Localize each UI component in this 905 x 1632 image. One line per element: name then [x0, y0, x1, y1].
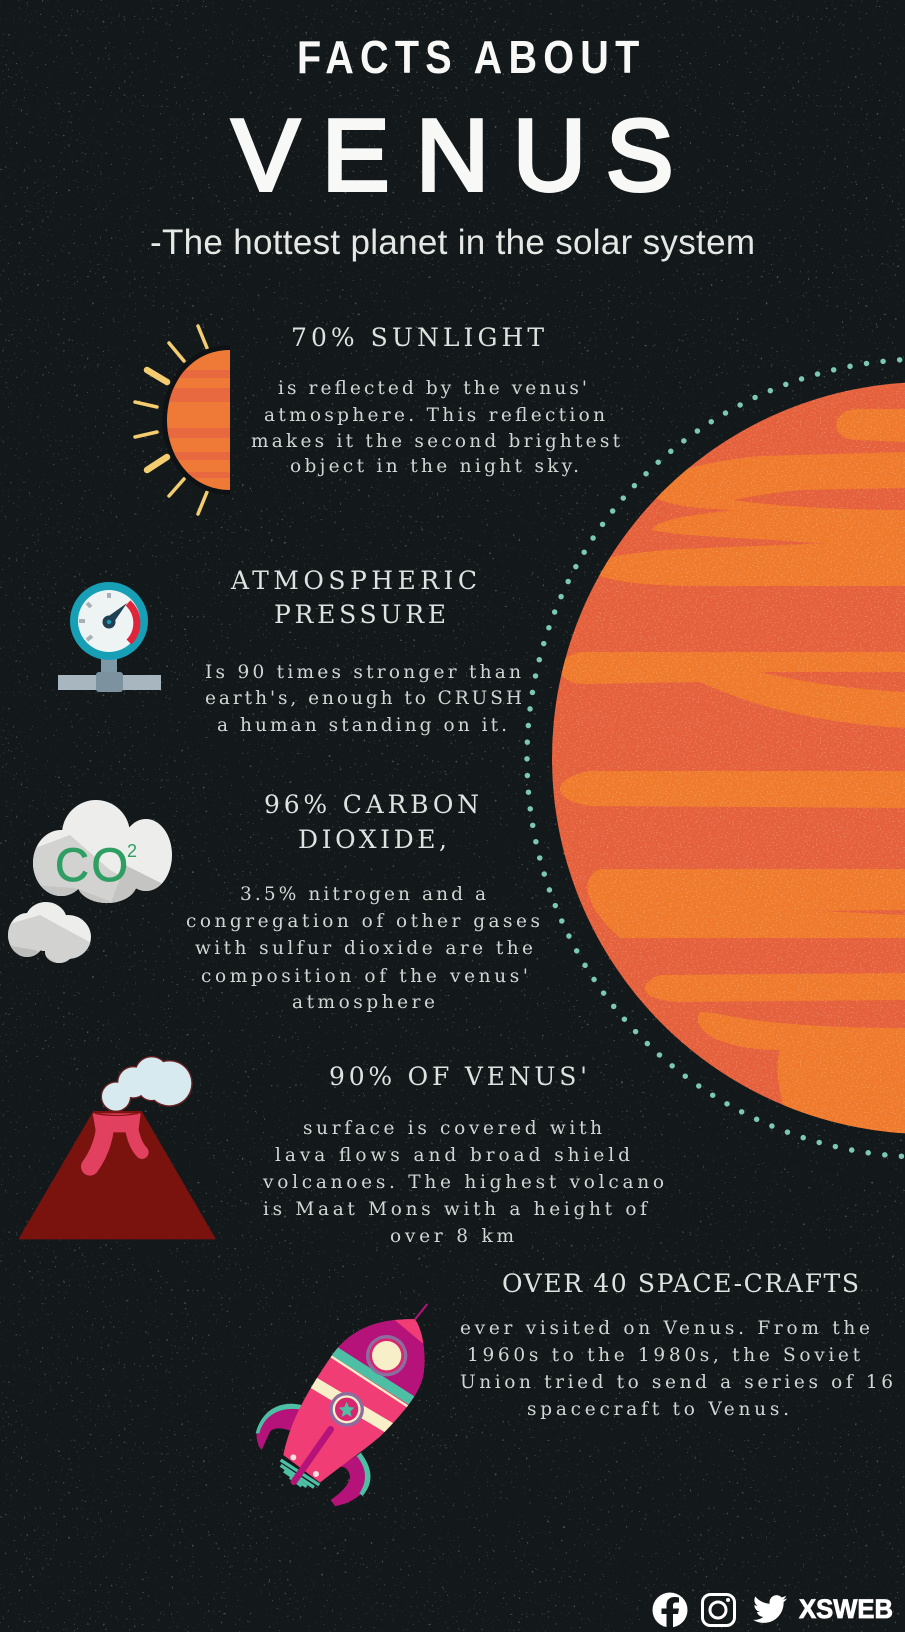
icon: rocket: [256, 1303, 447, 1506]
heading: DIOXIDE,: [298, 825, 447, 854]
icon: volcano: [18, 1057, 216, 1239]
lava: [90, 1113, 142, 1167]
title: [232, 32, 673, 212]
body text: spacecraft to Venus.: [527, 1399, 789, 1420]
heading: 70% SUNLIGHT: [291, 323, 544, 352]
planet venus with dotted orbit: [527, 359, 905, 1157]
body text: 3.5% nitrogen and a: [240, 884, 486, 905]
CO2 label: 2: [127, 841, 137, 861]
body text: congregation of other gases: [186, 911, 540, 932]
medallion with star: [329, 1392, 364, 1427]
fact: atmospheric pressure: [58, 566, 522, 736]
heading: [230, 566, 477, 629]
title line: facts about: FACTS ABOUT: [297, 32, 639, 84]
body text: makes it the second brightest: [251, 431, 621, 452]
body text: ever visited on Venus. From the: [460, 1318, 870, 1339]
fact: 90% of venus: [18, 1057, 664, 1247]
body text: Is 90 times stronger than: [205, 662, 521, 683]
exhaust stripes: [281, 1460, 319, 1487]
body text: composition of the venus': [201, 966, 528, 987]
right fin: [331, 1453, 368, 1506]
fact: carbon dioxide: [6, 790, 540, 1013]
left fin: [257, 1404, 302, 1450]
icon: twitter: [753, 1595, 787, 1623]
sun disc: [162, 345, 230, 495]
body text: 1960s to the 1980s, the Soviet: [467, 1345, 861, 1366]
body text: [460, 1318, 893, 1420]
heading: ATMOSPHERIC: [230, 566, 477, 595]
rocket body: [283, 1319, 424, 1482]
fact: space-crafts: [256, 1269, 893, 1506]
rivets: [290, 1454, 296, 1460]
sun rays: [135, 326, 207, 514]
antenna: [415, 1304, 427, 1319]
body text: surface is covered with: [303, 1118, 602, 1139]
footer branding: [652, 1592, 893, 1628]
body text: volcanoes. The highest volcano: [262, 1172, 664, 1193]
heading: OVER 40 SPACE-CRAFTS: [502, 1269, 859, 1298]
large cloud: [33, 800, 172, 903]
title line: venus: VENUS: [232, 100, 673, 212]
dotted orbit ring: [527, 359, 905, 1157]
icon: CO2 clouds: [6, 798, 175, 965]
body text: [262, 1118, 664, 1247]
planet disc: [540, 370, 905, 1150]
body text: is reflected by the venus': [278, 378, 587, 399]
body text: with sulfur dioxide are the: [195, 938, 533, 959]
heading: 96% CARBON: [264, 790, 479, 819]
icon: half sun: [135, 326, 232, 514]
body text: atmosphere. This reflection: [264, 405, 605, 426]
body text: over 8 km: [390, 1226, 514, 1247]
heading: 90% OF VENUS': [329, 1062, 587, 1091]
body text: lava flows and broad shield: [275, 1145, 630, 1166]
smoke cloud: [102, 1057, 191, 1111]
body text: earth's, enough to CRUSH: [205, 688, 522, 709]
hull stripe: [294, 1429, 331, 1482]
small cloud: [8, 902, 91, 963]
gauge ticks: [79, 593, 109, 640]
body text: [251, 378, 621, 477]
body text: a human standing on it.: [217, 715, 507, 736]
body text: is Maat Mons with a height of: [263, 1199, 648, 1220]
gauge needle: [106, 603, 127, 625]
icon: instagram: [702, 1594, 734, 1626]
fact: 70% sunlight: [135, 323, 621, 514]
brand name: XSWEB: [799, 1594, 893, 1624]
volcano cone: [18, 1111, 216, 1239]
body text: [205, 662, 522, 736]
body text: Union tried to send a series of 16: [460, 1372, 893, 1393]
body text: [186, 884, 540, 1013]
heading: [264, 790, 479, 854]
icon: pressure gauge: [58, 582, 161, 692]
body text: object in the night sky.: [290, 456, 579, 477]
gauge red zone: [128, 603, 137, 642]
subtitle: -The hottest planet in the solar system: [150, 223, 755, 262]
window: [366, 1335, 407, 1376]
heading: PRESSURE: [274, 600, 446, 629]
icon: facebook: [652, 1592, 688, 1628]
CO2 label: CO: [55, 838, 128, 891]
body text: atmosphere: [292, 992, 435, 1013]
